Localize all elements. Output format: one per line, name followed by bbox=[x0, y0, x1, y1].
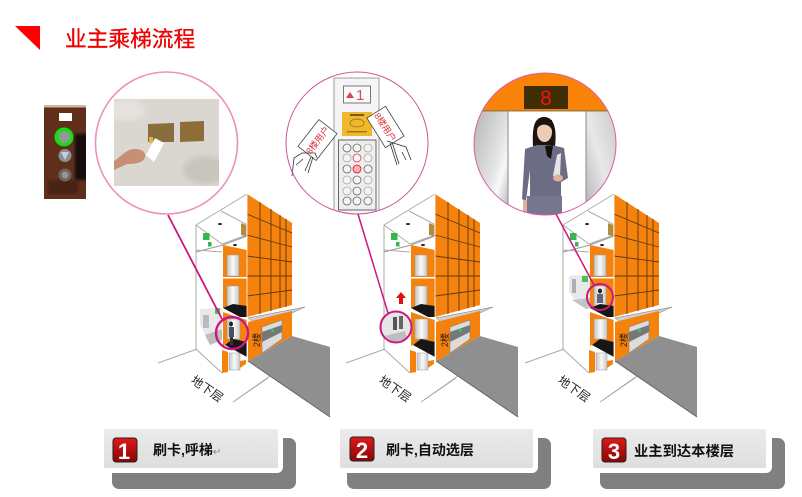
lobby gate bbox=[200, 308, 222, 345]
pointer line bbox=[556, 214, 594, 285]
person in elevator bbox=[597, 288, 603, 303]
icon: red corner triangle bbox=[15, 26, 40, 50]
step 1 label bar bbox=[98, 424, 296, 489]
highlight circle bbox=[216, 317, 248, 349]
label: basement: 地下层 bbox=[188, 373, 226, 405]
facade sign: 2楼 bbox=[439, 333, 450, 347]
keypad buttons bbox=[343, 144, 372, 205]
number badge: 2 bbox=[356, 438, 368, 463]
photo: hand swiping card bbox=[114, 99, 219, 186]
number badge bbox=[350, 437, 374, 463]
card reader bbox=[342, 112, 372, 136]
person bbox=[522, 117, 568, 218]
card: left hand: 8楼用户 bbox=[303, 124, 332, 156]
circle outline bbox=[96, 72, 238, 214]
step 2 label bar bbox=[334, 424, 551, 489]
pointer line bbox=[358, 214, 388, 313]
step text: 刷卡,呼梯↵ bbox=[153, 442, 221, 458]
lobby inset bbox=[381, 312, 411, 342]
floor display: 1 bbox=[356, 87, 364, 104]
pointer line bbox=[168, 215, 222, 319]
floor display: 8 bbox=[524, 86, 568, 110]
circle outline bbox=[286, 72, 428, 214]
building: step 2 bbox=[346, 194, 518, 417]
number badge: 3 bbox=[608, 439, 620, 464]
facade sign: 2楼 bbox=[618, 333, 629, 347]
number badge: 1 bbox=[118, 439, 130, 464]
upper lobby gate bbox=[569, 274, 590, 309]
photo: elevator call panel bbox=[44, 105, 89, 199]
panel: step 1 swipe card circle bbox=[96, 72, 238, 214]
building: step 3 bbox=[525, 194, 697, 417]
person at elevator bbox=[229, 322, 234, 345]
label: basement: 地下层 bbox=[555, 373, 593, 405]
highlight circle bbox=[380, 312, 412, 342]
title bbox=[15, 26, 195, 52]
card: right hand bbox=[367, 106, 411, 165]
number badge bbox=[113, 438, 137, 464]
arrow: up bbox=[396, 292, 406, 304]
label: basement: 地下层 bbox=[376, 373, 414, 405]
title text: 业主乘梯流程 bbox=[65, 26, 195, 52]
card: left hand bbox=[292, 120, 337, 176]
number badge bbox=[602, 438, 626, 464]
panel: step 3 arrival circle bbox=[470, 70, 620, 221]
facade sign: 2楼 bbox=[251, 333, 262, 347]
step text: 业主到达本楼层 bbox=[634, 442, 734, 460]
keypad panel bbox=[334, 78, 379, 214]
building: step 1 bbox=[158, 194, 330, 417]
step 3 label bar bbox=[587, 424, 785, 489]
step text: 刷卡,自动选层 bbox=[386, 442, 474, 458]
panel: step 2 keypad circle bbox=[286, 72, 428, 214]
card: right hand: 8楼用户 bbox=[372, 111, 399, 143]
highlight circle bbox=[587, 284, 613, 310]
floor display: 8: 8 bbox=[540, 87, 552, 110]
circle outline bbox=[474, 73, 616, 215]
